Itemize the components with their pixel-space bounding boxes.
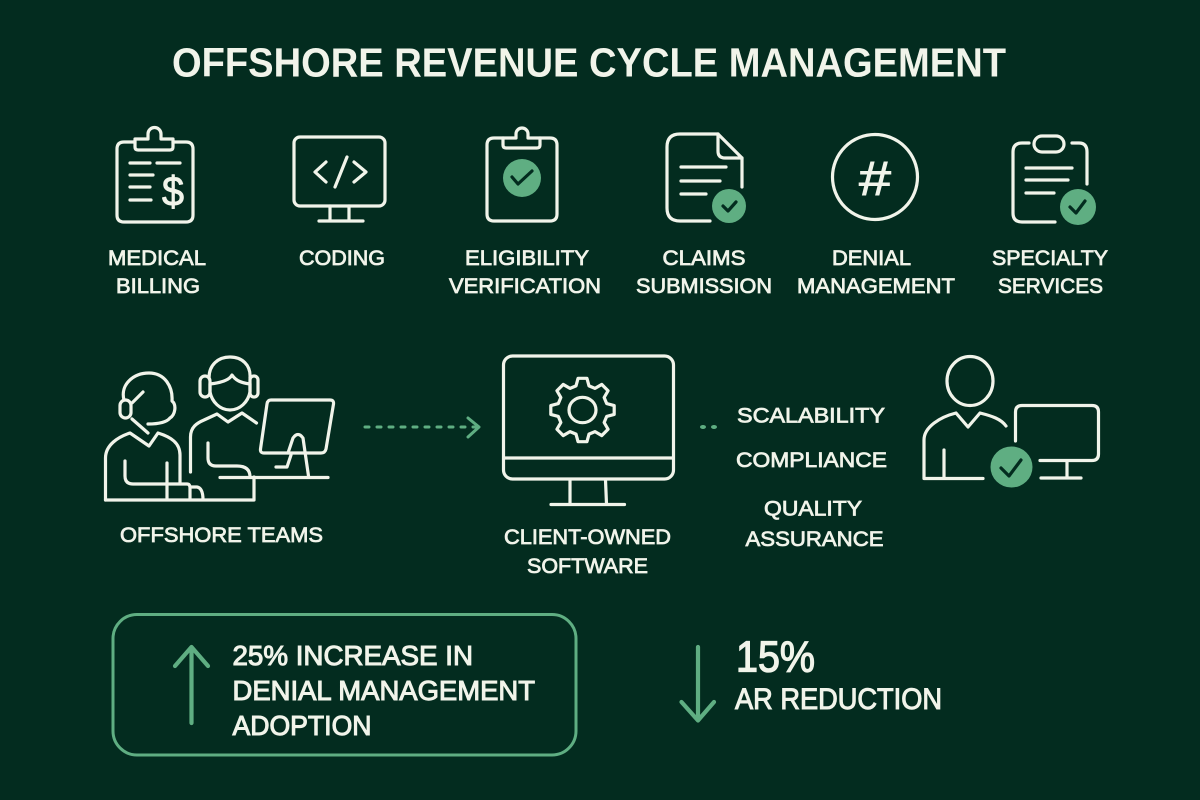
label: claims submission: CLAIMS (662, 247, 746, 270)
label: offshore teams: OFFSHORE TEAMS (120, 524, 323, 547)
label: claims submission: SUBMISSION (636, 275, 772, 298)
panel: services row (108, 128, 1108, 298)
label: claims submission (636, 247, 772, 298)
arrow: up (175, 647, 208, 723)
label: client-owned software (504, 526, 671, 578)
label: client-owned software: CLIENT-OWNED (504, 526, 671, 549)
icon: medical billing clipboard: $ (162, 168, 184, 214)
arrow: dotted to software (365, 418, 479, 437)
list: benefits (736, 404, 887, 551)
icon: specialty clipboard (1013, 136, 1096, 225)
stat text: 25% increase: DENIAL MANAGEMENT (232, 675, 535, 706)
gear (551, 378, 614, 442)
stat: 15% AR reduction (735, 632, 942, 716)
label: medical billing: MEDICAL (108, 247, 206, 270)
list: benefits: QUALITY (764, 498, 862, 520)
icon: client-owned software monitor (504, 356, 674, 504)
label: eligibility verification: ELIGIBILITY (465, 247, 589, 270)
list: benefits: ASSURANCE (746, 528, 884, 551)
arrow: down (682, 647, 714, 720)
list: benefits: SCALABILITY (737, 404, 885, 428)
label: medical billing: BILLING (116, 275, 200, 298)
label: eligibility verification: VERIFICATION (449, 275, 601, 298)
icon: denial hash circle: # (859, 153, 891, 206)
label: denial management: MANAGEMENT (797, 275, 955, 298)
label: specialty services: SPECIALTY (992, 247, 1108, 270)
workstation monitor (260, 400, 334, 476)
connector dots (700, 425, 717, 429)
callout: denial management adoption (113, 614, 576, 755)
label: specialty services: SERVICES (998, 275, 1103, 298)
icon: medical billing clipboard (117, 128, 193, 222)
rear agent (190, 357, 328, 478)
icon: denial hash circle (832, 134, 918, 220)
label: specialty services (992, 247, 1108, 298)
front agent (106, 373, 254, 500)
label: client-owned software: SOFTWARE (527, 555, 648, 578)
title: OFFSHORE REVENUE CYCLE MANAGEMENT (172, 40, 1006, 86)
icon: claims document (667, 134, 746, 223)
icon: coding monitor (294, 137, 385, 221)
icon: person with monitor and check (924, 356, 1098, 488)
stat text: 25% increase (232, 640, 535, 741)
stat text: 25% increase: ADOPTION (232, 710, 372, 741)
label: denial management: DENIAL (832, 247, 911, 270)
stat: 15% AR reduction: 15% (736, 632, 815, 682)
stat: 15% AR reduction: AR REDUCTION (735, 683, 942, 716)
stat text: 25% increase: 25% INCREASE IN (232, 640, 473, 671)
label: denial management (797, 247, 955, 298)
icon: offshore team at desk (106, 357, 334, 500)
label: eligibility verification (449, 247, 601, 298)
list: benefits: COMPLIANCE (736, 449, 887, 472)
label: medical billing (108, 247, 206, 298)
label: coding: CODING (299, 247, 385, 270)
icon: eligibility clipboard (487, 128, 557, 221)
